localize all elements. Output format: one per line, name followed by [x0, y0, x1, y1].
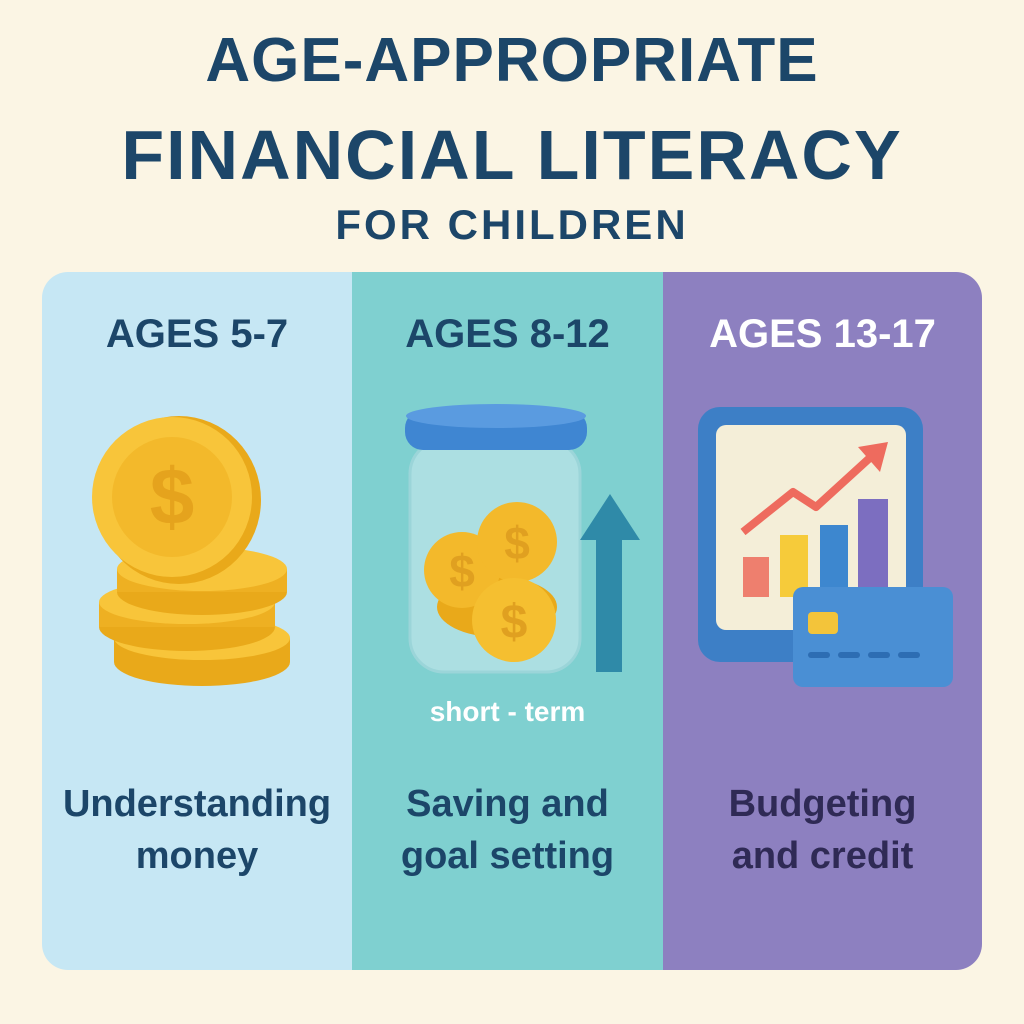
- title line 1: AGE-APPROPRIATE: [205, 26, 819, 95]
- text: budgeting and credit: [729, 783, 916, 877]
- icon: coin stack: $: [150, 452, 194, 541]
- title line 3: FOR CHILDREN: [335, 201, 689, 248]
- label: short-term: short - term: [430, 696, 585, 727]
- text: saving and goal setting: goal setting: [401, 835, 614, 877]
- panel: ages 13-17: [698, 312, 953, 877]
- text: understanding money: Understanding: [63, 783, 331, 825]
- text: understanding money: money: [136, 835, 258, 877]
- panels container: [42, 272, 982, 970]
- panel: ages 5-7: [63, 312, 331, 877]
- icon: jar with coins and arrow: $: [504, 517, 530, 569]
- icon: chart and credit card: [698, 407, 953, 687]
- icon: jar with coins and arrow: $: [449, 545, 475, 597]
- title: [121, 26, 903, 248]
- icon: coin stack: [92, 416, 290, 686]
- icon: jar with coins and arrow: $: [501, 596, 528, 649]
- text: budgeting and credit: Budgeting: [729, 783, 916, 825]
- text: saving and goal setting: Saving and: [406, 783, 609, 825]
- panel: ages 8-12: [401, 312, 640, 877]
- text: saving and goal setting: [401, 783, 614, 877]
- heading 5-7: AGES 5-7: [106, 312, 288, 356]
- icon: jar with coins and arrow: [405, 404, 640, 674]
- title line 2: FINANCIAL LITERACY: [121, 116, 903, 194]
- heading 8-12: AGES 8-12: [405, 312, 610, 356]
- text: understanding money: [63, 783, 331, 877]
- heading 13-17: AGES 13-17: [709, 312, 936, 356]
- text: budgeting and credit: and credit: [732, 835, 913, 877]
